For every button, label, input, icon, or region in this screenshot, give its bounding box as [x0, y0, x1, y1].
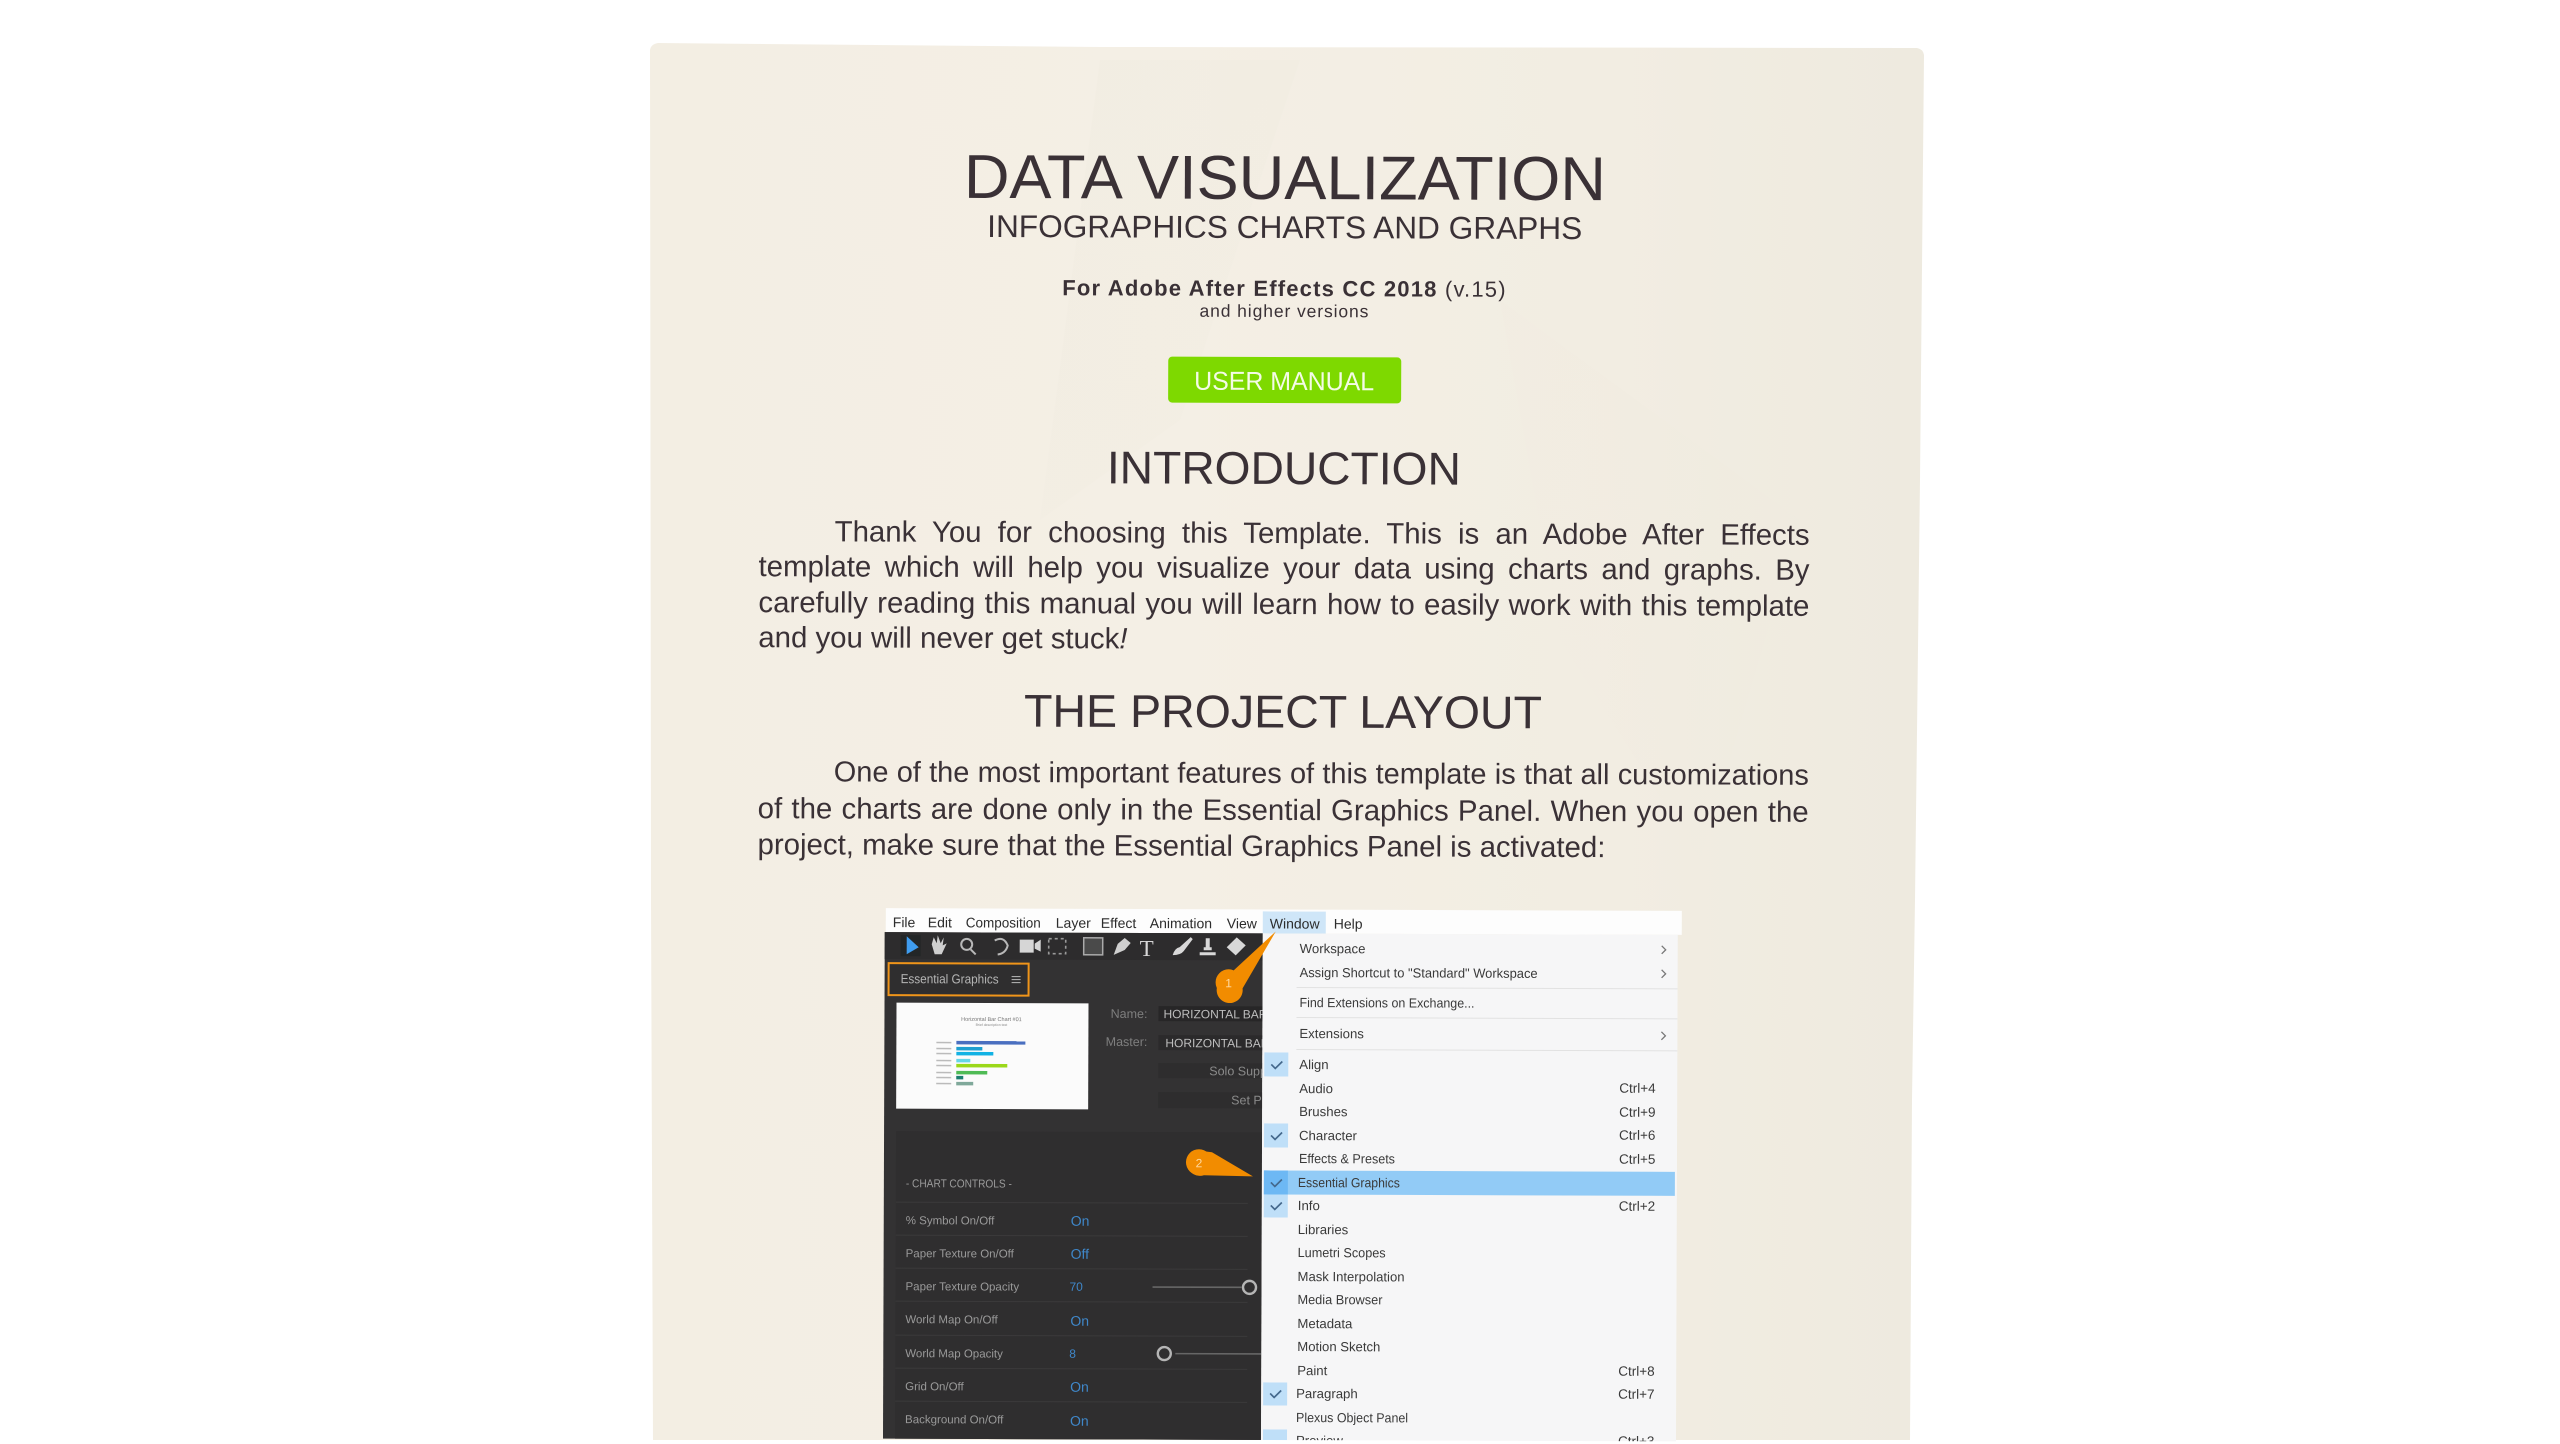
menu items: Effects & Presets — [1299, 1151, 1395, 1166]
menu items: Workspace — [1300, 941, 1365, 956]
menu items: Character — [1299, 1128, 1358, 1143]
heading: introduction: INTRODUCTION — [1107, 441, 1461, 495]
chart controls list: 70 — [1069, 1280, 1083, 1294]
keyboard shortcuts: Ctrl+2 — [1619, 1199, 1655, 1214]
essential graphics panel tab — [889, 963, 1029, 996]
keyboard shortcuts: Ctrl+6 — [1619, 1128, 1655, 1143]
menu items: Lumetri Scopes — [1298, 1245, 1386, 1260]
subtitle: INFOGRAPHICS CHARTS AND GRAPHS — [987, 208, 1582, 246]
chart controls list: World Map On/Off — [905, 1314, 998, 1327]
title: DATA VISUALIZATION — [964, 143, 1606, 214]
software version line: For Adobe After Effects CC 2018 (v.15) — [1062, 275, 1507, 302]
menu bar — [886, 908, 1682, 935]
chart controls list: - CHART CONTROLS - — [906, 1178, 1012, 1191]
menu items: Brushes — [1299, 1104, 1348, 1119]
composition name and master fields: Solo Supp — [1209, 1064, 1267, 1078]
project layout paragraph: of the charts are done only in the Essential Graphics Panel. When you open the — [758, 792, 1809, 829]
menu items: Motion Sketch — [1297, 1339, 1380, 1354]
menu bar: Edit — [928, 914, 952, 930]
menu items: Mask Interpolation — [1298, 1269, 1405, 1284]
menu items: Plexus Object Panel — [1296, 1410, 1408, 1425]
callout 2: points to Essential Graphics item — [1186, 1149, 1253, 1176]
chart controls list: Paper Texture Opacity — [905, 1281, 1019, 1294]
menu items: Paint — [1297, 1363, 1328, 1378]
introduction paragraph: and you will never get stuck! — [758, 621, 1128, 656]
menu bar: Animation — [1150, 915, 1212, 931]
dark application panel — [883, 932, 1263, 1443]
composition name and master fields: HORIZONTAL BAR — [1165, 1036, 1270, 1050]
chart controls list: 8 — [1069, 1347, 1076, 1361]
menu items: Libraries — [1298, 1222, 1349, 1237]
chart thumbnail preview — [896, 1003, 1089, 1109]
keyboard shortcuts: Ctrl+4 — [1619, 1081, 1656, 1096]
chart controls list: On — [1071, 1213, 1089, 1229]
menu items: Assign Shortcut to "Standard" Workspace — [1300, 965, 1538, 981]
chart controls list: On — [1070, 1313, 1089, 1329]
chart controls list: Paper Texture On/Off — [906, 1248, 1015, 1261]
project layout paragraph: One of the most important features of this template is that all customizations — [834, 756, 1809, 792]
composition name and master fields: Master: — [1106, 1035, 1147, 1049]
menu items — [1296, 941, 1538, 1444]
keyboard shortcuts: Ctrl+9 — [1619, 1105, 1656, 1120]
chart controls list: Background On/Off — [905, 1414, 1004, 1427]
menu items: Paragraph — [1296, 1386, 1358, 1401]
menu items: Audio — [1299, 1081, 1333, 1096]
keyboard shortcuts: Ctrl+5 — [1619, 1152, 1655, 1167]
menu items: Metadata — [1297, 1316, 1353, 1331]
keyboard shortcuts: Ctrl+7 — [1618, 1387, 1655, 1402]
submenu chevrons — [1661, 946, 1666, 1040]
chart controls list: On — [1070, 1413, 1089, 1429]
keyboard shortcuts — [1618, 1081, 1656, 1444]
introduction paragraph: Thank You for choosing this Template. This is an Adobe After Effects — [835, 515, 1810, 552]
essential graphics highlighted row — [1264, 1170, 1675, 1196]
chart thumbnail preview: Horizontal Bar Chart #01 — [961, 1017, 1022, 1023]
chart thumbnail preview: Brief description text — [976, 1023, 1007, 1027]
toolbar icons — [885, 932, 1263, 961]
heading: the project layout: THE PROJECT LAYOUT — [1024, 685, 1542, 738]
menu bar: Composition — [966, 914, 1041, 931]
composition name and master fields: Set P — [1231, 1093, 1262, 1107]
menu bar: Help — [1334, 916, 1363, 932]
menu bar: View — [1227, 915, 1258, 931]
chart controls list: Grid On/Off — [905, 1381, 965, 1393]
menu bar: Layer — [1056, 915, 1091, 931]
composition name and master fields: Name: — [1111, 1007, 1147, 1021]
menu bar: Window — [1270, 915, 1320, 932]
menu items: Media Browser — [1297, 1292, 1383, 1307]
essential graphics panel tab: Essential Graphics — [901, 971, 999, 987]
window dropdown menu — [1261, 933, 1678, 1444]
introduction paragraph: template which will help you visualize your data using charts and graphs. By — [758, 551, 1810, 587]
menu items: Align — [1299, 1057, 1329, 1072]
chart controls list: World Map Opacity — [905, 1348, 1003, 1361]
menu bar: File — [893, 914, 916, 930]
composition name and master fields — [1105, 1006, 1270, 1108]
callout 2: points to Essential Graphics item: 2 — [1196, 1156, 1203, 1170]
menu items: Essential Graphics — [1298, 1175, 1400, 1190]
chart controls list: Off — [1071, 1246, 1089, 1262]
user manual button: USER MANUAL — [1194, 366, 1374, 396]
project layout paragraph: project, make sure that the Essential Graphics Panel is activated: — [758, 828, 1605, 864]
software version line: and higher versions — [1199, 301, 1369, 321]
menu items: Info — [1298, 1198, 1320, 1213]
checkmark boxes — [1263, 1052, 1288, 1444]
menu bar: Effect — [1101, 915, 1136, 931]
keyboard shortcuts: Ctrl+8 — [1618, 1364, 1655, 1379]
callout 1: points to Window menu: 1 — [1225, 976, 1232, 990]
chart controls list: % Symbol On/Off — [906, 1215, 995, 1227]
chart controls list: On — [1070, 1379, 1089, 1395]
introduction paragraph: carefully reading this manual you will learn how to easily work with this template — [758, 586, 1809, 623]
project layout paragraph — [758, 756, 1809, 864]
chart controls list — [895, 1131, 1262, 1443]
menu items: Find Extensions on Exchange... — [1299, 995, 1475, 1011]
introduction paragraph — [758, 515, 1810, 656]
toolbar icons: T — [1140, 936, 1154, 961]
composition name and master fields: HORIZONTAL BAR — [1163, 1007, 1268, 1021]
callout 1: points to Window menu — [1216, 931, 1276, 1003]
menu items: Extensions — [1299, 1026, 1364, 1041]
